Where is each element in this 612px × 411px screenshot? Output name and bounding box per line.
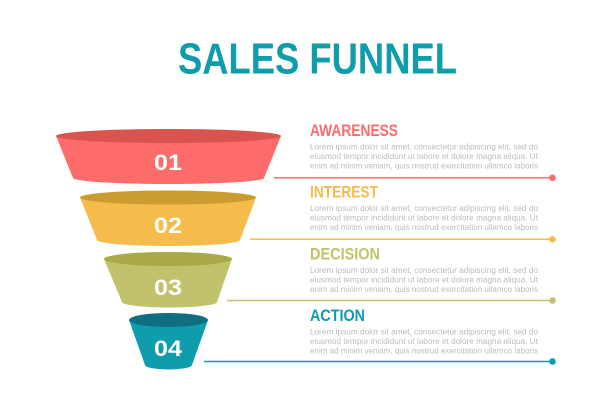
funnel tier 1 — [56, 129, 281, 184]
funnel tier 2: 02 — [154, 213, 182, 238]
text block: decision: Lorem ipsum dolor sit amet, consectetur adipiscing elit, sed do — [310, 265, 538, 275]
text block: action — [310, 306, 539, 356]
text block: decision: DECISION — [310, 244, 380, 264]
text block: action: eiusmod tempor incididunt ut labore et dolore magna aliqua. Ut — [310, 336, 539, 346]
funnel tier 4: 04 — [154, 336, 183, 361]
connector: awareness — [274, 174, 556, 181]
text block: interest: eiusmod tempor incididunt ut labore et dolore magna aliqua. Ut — [310, 212, 539, 222]
connector: action — [204, 358, 556, 365]
funnel tier 4 — [129, 313, 208, 370]
funnel tier 1: 01 — [154, 150, 182, 175]
text block: awareness: eiusmod tempor incididunt ut labore et dolore magna aliqua. Ut — [310, 151, 539, 161]
text block: interest: INTEREST — [310, 182, 378, 202]
text block: awareness: enim ad minim veniam, quis nostrud exercitation ullamco laboris — [310, 160, 538, 170]
title: SALES FUNNEL — [178, 34, 457, 84]
connector: decision — [227, 297, 556, 304]
text block: action: Lorem ipsum dolor sit amet, consectetur adipiscing elit, sed do — [310, 326, 538, 336]
connector: interest — [250, 236, 556, 243]
funnel tier 3 — [104, 252, 232, 308]
text block: awareness: Lorem ipsum dolor sit amet, consectetur adipiscing elit, sed do — [310, 142, 538, 152]
text block: decision: eiusmod tempor incididunt ut labore et dolore magna aliqua. Ut — [310, 274, 539, 284]
funnel tier 3: 03 — [154, 275, 182, 300]
text block: interest: Lorem ipsum dolor sit amet, consectetur adipiscing elit, sed do — [310, 203, 538, 213]
text block: decision — [310, 244, 539, 294]
text block: interest — [310, 182, 539, 232]
text block: interest: enim ad minim veniam, quis nostrud exercitation ullamco laboris — [310, 222, 538, 232]
text block: awareness — [310, 121, 539, 170]
text block: action: ACTION — [310, 306, 365, 325]
text block: action: enim ad minim veniam, quis nostrud exercitation ullamco laboris — [310, 346, 538, 356]
text block: decision: enim ad minim veniam, quis nostrud exercitation ullamco laboris — [310, 284, 538, 294]
text block: awareness: AWARENESS — [310, 121, 398, 140]
funnel tier 2 — [80, 190, 256, 246]
